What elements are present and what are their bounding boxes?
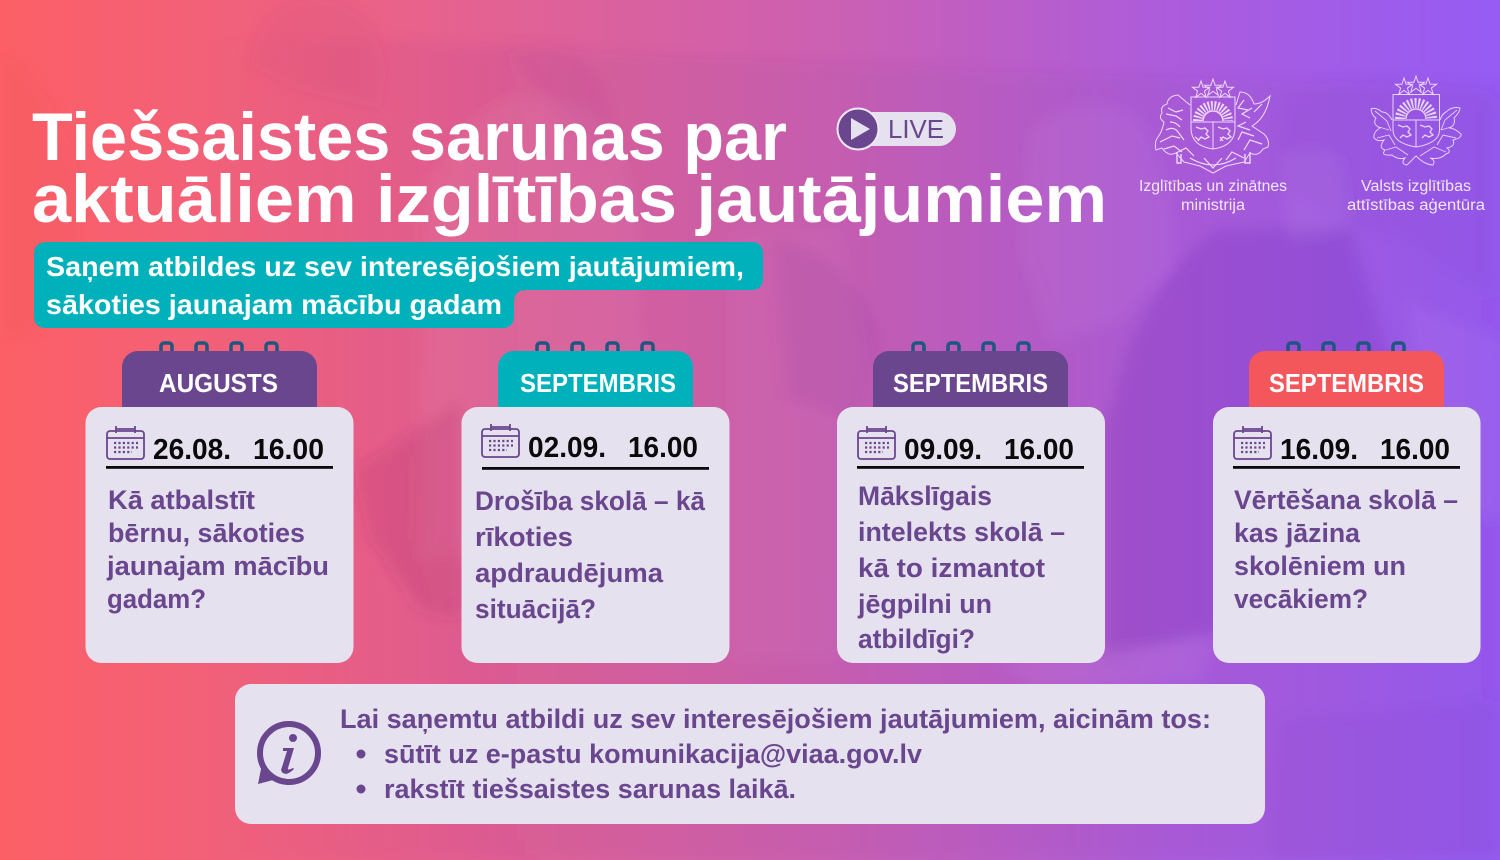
card <box>1213 407 1480 663</box>
subtitle banner: Saņem atbildes uz sev interesējošiem jautājumiem, <box>46 251 744 282</box>
text: ministry name <box>1139 178 1287 214</box>
calendar tab: month: SEPTEMBRIS <box>893 368 1048 398</box>
date and time: 16.00 <box>1004 434 1074 466</box>
calendar tab: month: AUGUSTS <box>159 368 278 398</box>
calendar tab: month <box>122 351 317 421</box>
question text: Drošība skolā – kā <box>475 486 706 516</box>
question text: rīkoties <box>475 522 573 552</box>
question text: situācijā? <box>475 594 596 624</box>
text: agency name: Valsts izglītības <box>1361 178 1471 195</box>
info text <box>340 704 1211 804</box>
calendar tab: rings <box>161 343 277 359</box>
question text <box>106 485 329 614</box>
question text: gadam? <box>107 584 206 614</box>
question text <box>857 481 1065 654</box>
calendar tab: month <box>498 351 693 421</box>
calendar tab: month: SEPTEMBRIS <box>1269 368 1424 398</box>
panel: information callout <box>235 684 1265 824</box>
icon: live badge: LIVE <box>888 114 944 144</box>
calendar tab: month <box>1249 351 1444 421</box>
subtitle banner <box>34 242 763 328</box>
question text <box>1234 485 1458 614</box>
calendar tab: rings <box>1288 343 1404 359</box>
date and time <box>1233 434 1460 469</box>
icon: calendar <box>482 424 519 457</box>
card <box>462 407 730 663</box>
text: agency name: attīstības aģentūra <box>1347 197 1485 214</box>
date and time: 16.00 <box>1380 434 1450 466</box>
date and time: 02.09. <box>528 432 606 464</box>
question text: bērnu, sākoties <box>108 518 305 548</box>
title: aktuāliem izglītības jautājumiem <box>32 161 1107 237</box>
question text: vecākiem? <box>1234 584 1368 614</box>
card <box>86 407 354 663</box>
calendar tab: rings <box>537 343 653 359</box>
calendar tab: month <box>873 351 1068 421</box>
icon: live badge <box>838 108 956 150</box>
card <box>837 407 1105 663</box>
calendar tab: rings <box>913 343 1029 359</box>
date and time: 26.08. <box>153 434 231 466</box>
info text: rakstīt tiešsaistes sarunas laikā. <box>384 774 796 804</box>
question text: apdraudējuma <box>475 558 664 588</box>
calendar tab: month: SEPTEMBRIS <box>520 368 676 398</box>
icon: large coat of arms <box>1155 79 1270 173</box>
text: ministry name: Izglītības un zinātnes <box>1139 178 1287 195</box>
question text: Kā atbalstīt <box>108 485 255 515</box>
logo: state education development agency <box>1347 76 1485 214</box>
question text: atbildīgi? <box>858 624 975 654</box>
panel: session 09.09 <box>837 343 1105 663</box>
icon: calendar <box>1234 426 1271 459</box>
question text: Mākslīgais <box>858 481 992 511</box>
date and time: 09.09. <box>904 434 982 466</box>
date and time: 16.09. <box>1280 434 1358 466</box>
question text: kā to izmantot <box>858 553 1045 583</box>
panel: session 16.09 <box>1213 343 1480 663</box>
info text: Lai saņemtu atbildi uz sev interesējošiem jautājumiem, aicinām tos: <box>340 704 1211 734</box>
date and time: 16.00 <box>628 432 698 464</box>
icon: calendar <box>858 426 895 459</box>
logo: ministry of education and science <box>1139 79 1287 214</box>
panel: session 02.09 <box>462 343 730 663</box>
question text: jaunajam mācību <box>106 551 329 581</box>
question text <box>475 486 706 624</box>
icon: info speech bubble <box>258 724 318 784</box>
panel: session 26.08 <box>86 343 354 663</box>
icon: small coat of arms <box>1371 76 1461 165</box>
question text: skolēniem un <box>1234 551 1406 581</box>
text: agency name <box>1347 178 1485 214</box>
question text: kas jāzina <box>1234 518 1361 548</box>
question text: jēgpilni un <box>857 589 992 619</box>
date and time: 16.00 <box>253 434 324 466</box>
info text: sūtīt uz e-pastu komunikacija@viaa.gov.lv <box>384 739 922 769</box>
date and time <box>482 432 709 470</box>
question text: intelekts skolā – <box>858 517 1065 547</box>
date and time <box>106 434 333 469</box>
title <box>32 99 1107 237</box>
title: Tiešsaistes sarunas par <box>32 99 787 175</box>
icon: calendar <box>107 426 144 459</box>
question text: Vērtēšana skolā – <box>1234 485 1458 515</box>
text: ministry name: ministrija <box>1181 197 1245 214</box>
subtitle banner: sākoties jaunajam mācību gadam <box>46 289 502 320</box>
date and time <box>857 434 1084 469</box>
